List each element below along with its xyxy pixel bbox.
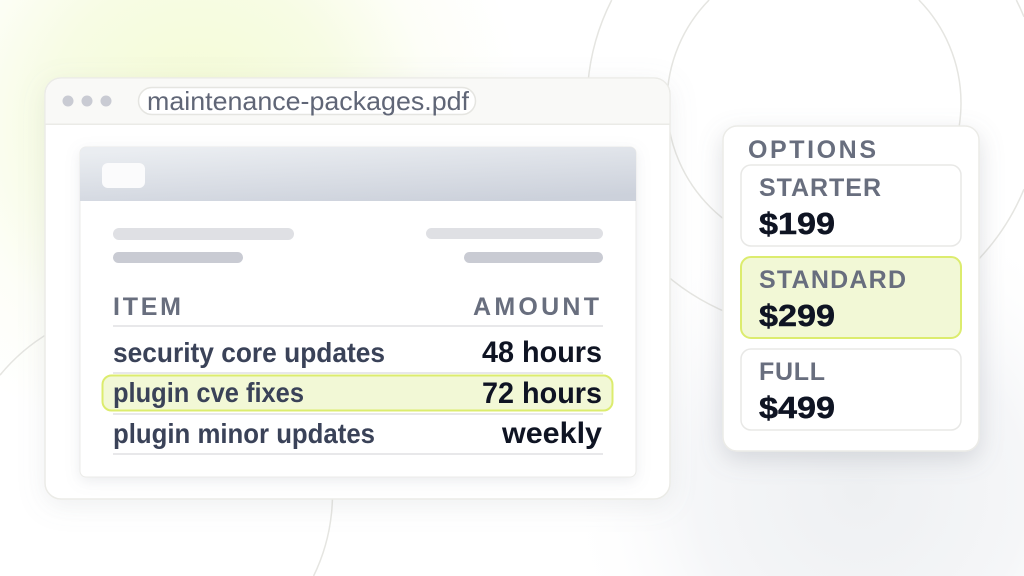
row highlight	[102, 376, 612, 410]
row: plugin cve fixes: 72 hours	[482, 377, 602, 410]
row: plugin minor updates: weekly	[501, 417, 603, 450]
table header: ITEM	[113, 293, 181, 321]
panel: document	[80, 147, 636, 477]
options heading: OPTIONS	[748, 136, 876, 164]
option card: starter	[741, 165, 961, 246]
option card: starter: $199	[759, 206, 835, 241]
option card: starter: STARTER	[759, 174, 881, 202]
row: security core updates: security core updates	[113, 337, 385, 368]
row: security core updates	[113, 336, 602, 369]
window control dots	[62, 96, 112, 106]
panel: options	[723, 126, 979, 451]
row: plugin cve fixes: plugin cve fixes	[113, 377, 304, 408]
row: plugin minor updates: plugin minor updates	[113, 418, 375, 449]
document header	[80, 147, 636, 201]
option card: standard (selected)	[741, 257, 961, 338]
option card: standard (selected): $299	[759, 298, 835, 333]
row: security core updates: 48 hours	[482, 336, 602, 369]
option card: full: $499	[759, 390, 835, 425]
option card: standard (selected): STANDARD	[759, 266, 906, 294]
logo placeholder	[102, 163, 145, 188]
placeholder text bars	[113, 228, 603, 263]
row: plugin minor updates	[113, 417, 603, 450]
browser title bar	[46, 79, 669, 124]
row: plugin cve fixes	[113, 377, 602, 410]
table header: AMOUNT	[473, 293, 599, 321]
panel: browser window	[45, 78, 670, 499]
option card: full: FULL	[759, 358, 825, 386]
table	[102, 293, 612, 455]
option card: full	[741, 349, 961, 430]
filename pill: maintenance-packages.pdf	[147, 86, 470, 116]
table header	[113, 293, 599, 321]
